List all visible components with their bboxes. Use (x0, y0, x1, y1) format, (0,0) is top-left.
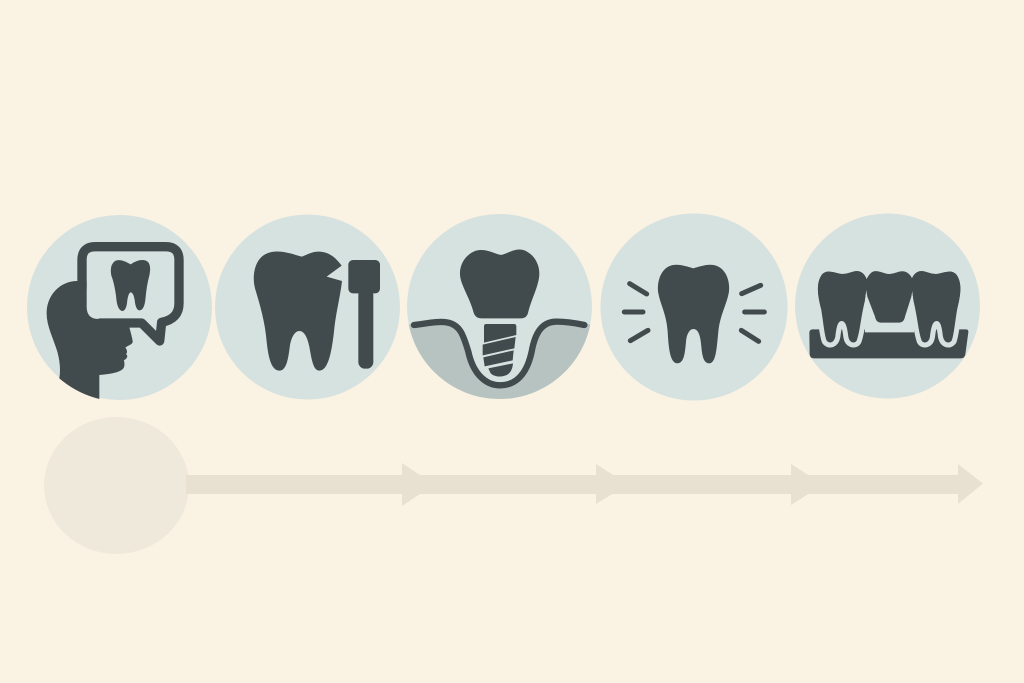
icon: tooth with radiating lines (624, 265, 764, 363)
icon: implant crown, screw and gum (403, 249, 597, 405)
sensitivity circle (600, 214, 788, 400)
panel: consultation (27, 215, 212, 400)
icon: head with speech bubble and tooth (47, 247, 179, 399)
implant circle (407, 214, 592, 399)
icon: chipped tooth with dental tool (254, 252, 380, 371)
panel: implant (403, 214, 597, 405)
bridge circle (795, 214, 980, 398)
panel: dental bridge (795, 214, 980, 398)
timeline start circle (44, 417, 189, 554)
icon: three-tooth bridge over gum (809, 271, 968, 358)
timeline: start circle and arrow (44, 417, 983, 554)
panel: damaged tooth and tool (215, 214, 400, 400)
panel: tooth sensitivity (600, 214, 788, 400)
infographic: dental journey icons and timeline (27, 214, 982, 554)
timeline arrow with chevrons (186, 463, 983, 506)
consultation circle (27, 215, 212, 400)
damaged tooth circle (215, 214, 400, 400)
